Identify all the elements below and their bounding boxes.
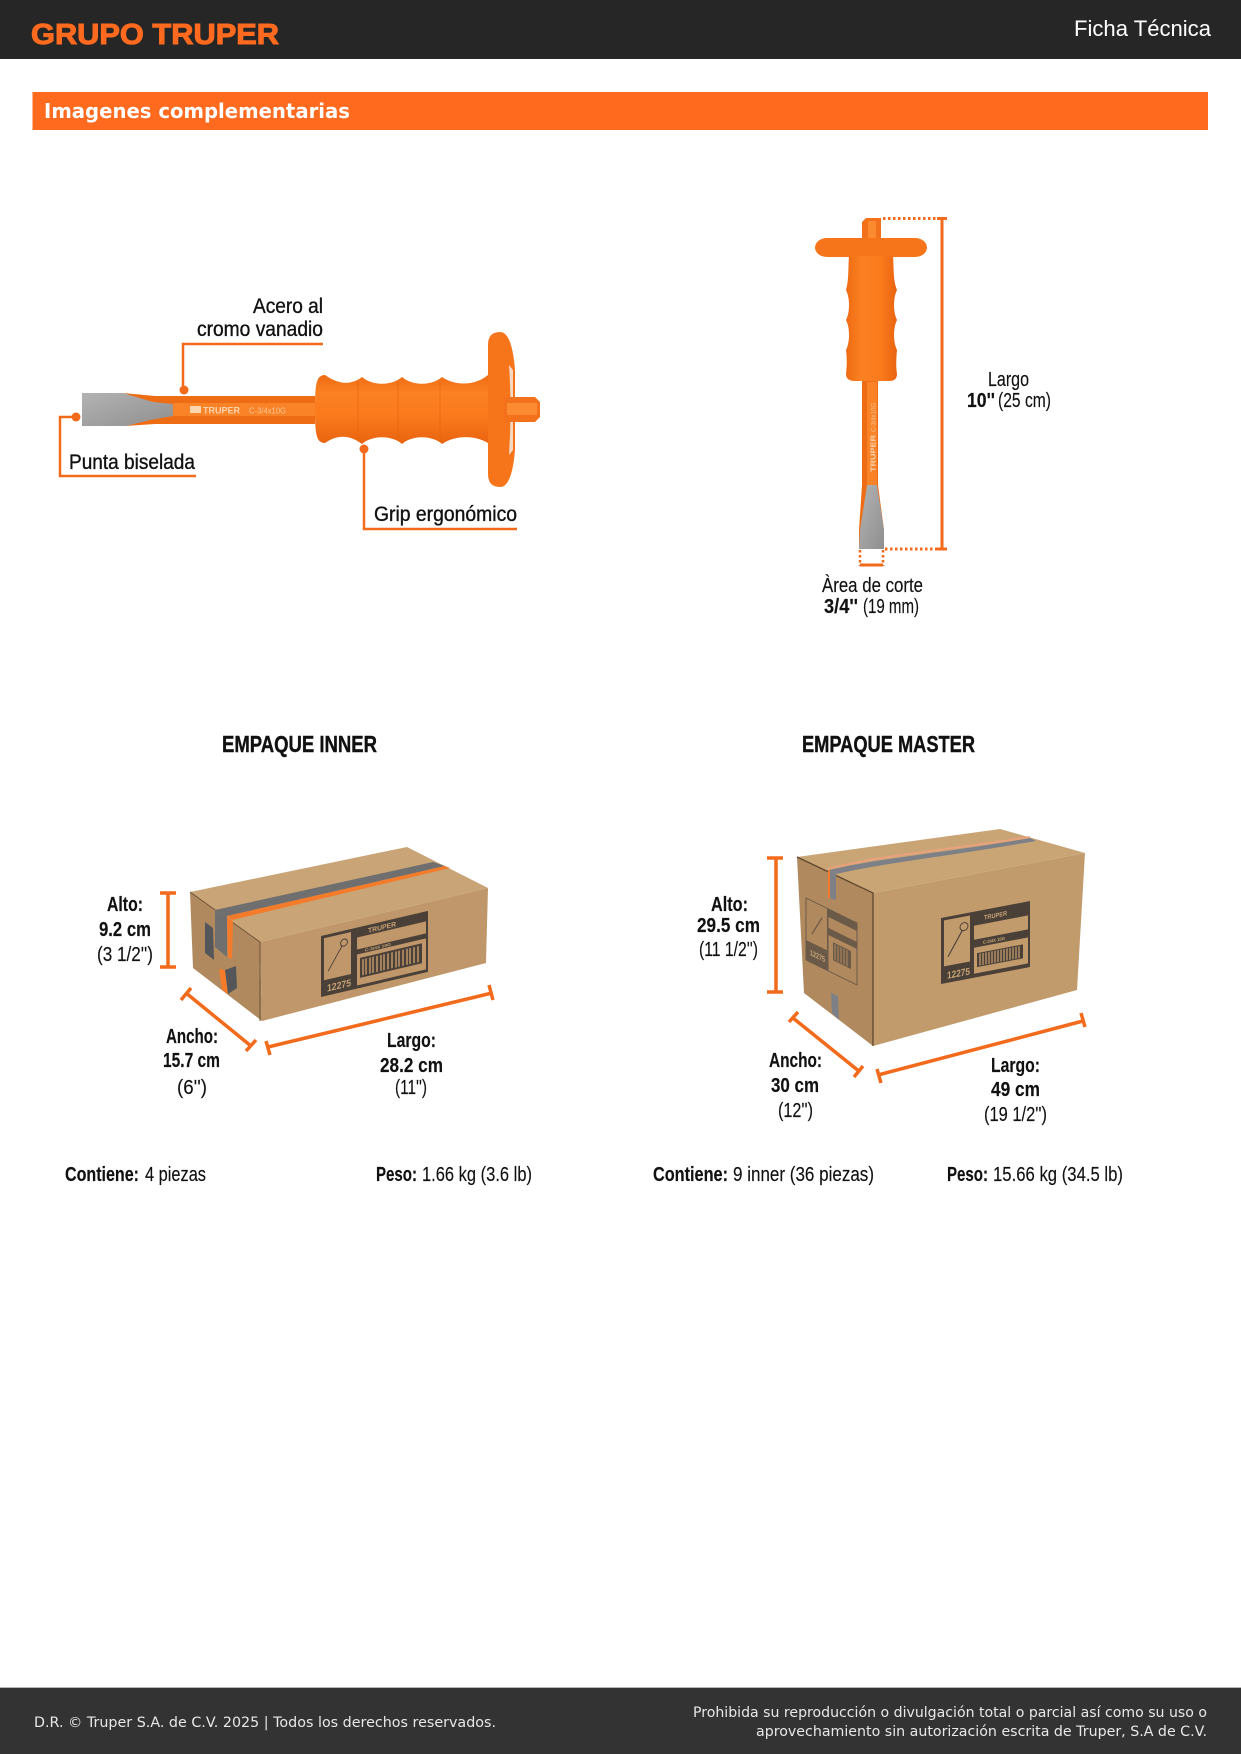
label: alto inner: 9.2 cm [99, 919, 151, 941]
callout: Acero al cromo vanadio [180, 295, 323, 394]
master contents: Contiene: [653, 1164, 728, 1186]
dimension line: largo master [877, 1013, 1085, 1083]
package label: master front [941, 901, 1030, 984]
package label: inner front [321, 911, 428, 997]
label: alto master: Alto: [711, 894, 748, 916]
callout: Punta biselada: Punta biselada [69, 451, 195, 474]
chisel horizontal [82, 332, 540, 487]
callout: Grip ergonómico [360, 444, 517, 529]
label: alto inner: Alto: [107, 894, 143, 916]
dimension: Área de corte line [860, 550, 883, 566]
footer legal notice [693, 1705, 1207, 1740]
master weight [947, 1164, 1123, 1186]
label: alto inner: (3 1/2'') [97, 944, 153, 966]
inner weight: Peso: [376, 1164, 417, 1186]
heading: Empaque Inner: EMPAQUE INNER [222, 731, 377, 757]
label: largo master: Largo: [991, 1055, 1040, 1077]
section heading: Imagenes complementarias: Imagenes complementarias [44, 99, 350, 123]
label: largo master: (19 1/2'') [984, 1104, 1047, 1126]
section heading: Imagenes complementarias [32, 92, 1208, 130]
product photo: vertical chisel with dimensions [815, 218, 1051, 618]
dimension line: largo inner [266, 985, 493, 1055]
cardboard box: master [797, 829, 1085, 1046]
master box with dimensions [697, 829, 1085, 1126]
inner contents: 4 piezas [145, 1164, 206, 1186]
label: ancho master: Ancho: [769, 1050, 822, 1072]
callout: Acero al cromo vanadio: cromo vanadio [197, 318, 323, 341]
master weight: Peso: [947, 1164, 988, 1186]
callout: Punta biselada [60, 412, 196, 476]
product photo: horizontal chisel with callouts [60, 295, 540, 529]
callout: Acero al cromo vanadio: Acero al [253, 295, 323, 318]
package label: master front: 12275 [947, 966, 970, 982]
chisel horizontal: C-3/4x10G [249, 406, 286, 416]
label: largo inner: (11'') [395, 1077, 427, 1099]
footer bar [0, 1687, 1241, 1754]
master contents: 9 inner (36 piezas) [733, 1164, 874, 1186]
label: largo inner: Largo: [387, 1030, 436, 1052]
label: alto master [697, 894, 760, 961]
dimension label: Largo 10 in [967, 369, 1051, 412]
label: largo inner [380, 1030, 443, 1099]
dimension label: Largo 10 in: 10'' [967, 390, 995, 412]
label: alto master: 29.5 cm [697, 915, 760, 937]
master weight: 15.66 kg (34.5 lb) [993, 1164, 1123, 1186]
label: alto master: (11 1/2'') [699, 939, 758, 961]
dimension label: Largo 10 in: (25 cm) [998, 390, 1051, 412]
inner weight [376, 1164, 532, 1186]
inner box with dimensions [97, 847, 493, 1099]
label: alto inner [97, 894, 153, 966]
package label: master front: TRUPER [984, 910, 1007, 922]
dimension line: ancho inner [181, 988, 256, 1051]
label: ancho inner: Ancho: [166, 1026, 218, 1048]
dimension label: Àrea de corte: 3/4'' [824, 596, 858, 618]
label: largo master: 49 cm [991, 1079, 1040, 1101]
label: largo inner: 28.2 cm [380, 1055, 443, 1077]
package label: master front: C-3/4X 10G [983, 936, 1005, 945]
dimension line: alto master [767, 858, 783, 992]
dimension line: ancho master [789, 1012, 863, 1077]
package label: master side: 12275 [810, 947, 825, 964]
master contents [653, 1164, 874, 1186]
dimension label: Largo 10 in: Largo [988, 369, 1029, 391]
dimension label: Àrea de corte: Àrea de corte [822, 574, 923, 597]
package label: inner front: TRUPER [368, 920, 396, 935]
footer legal notice: aprovechamiento sin autorización escrita de Truper, S.A de C.V. [756, 1724, 1207, 1740]
chisel horizontal: TRUPER [203, 406, 240, 416]
package label: inner front: 12275 [327, 978, 351, 995]
label: ancho inner: (6'') [177, 1077, 207, 1099]
dimension: Largo line [883, 218, 947, 549]
dimension label: Àrea de corte [822, 574, 923, 618]
dimension label: Àrea de corte: (19 mm) [863, 596, 919, 618]
chisel vertical: C-3/4x10G [870, 403, 878, 432]
chisel vertical [815, 218, 927, 549]
dimension line: alto inner [160, 893, 176, 967]
cardboard box: inner [190, 847, 488, 1021]
footer copyright: D.R. © Truper S.A. de C.V. 2025 | Todos los derechos reservados. [34, 1715, 496, 1731]
footer legal notice: Prohibida su reproducción o divulgación total o parcial así como su uso o [693, 1705, 1207, 1721]
inner weight: 1.66 kg (3.6 lb) [422, 1164, 532, 1186]
inner contents: Contiene: [65, 1164, 139, 1186]
header label: Ficha Técnica: Ficha Técnica [1074, 16, 1212, 41]
label: largo master [984, 1055, 1047, 1126]
chisel vertical: TRUPER [868, 434, 878, 472]
label: ancho inner: 15.7 cm [163, 1050, 220, 1072]
package label: inner front: C-3/4X 10G [365, 942, 391, 953]
label: ancho master: 30 cm [771, 1075, 819, 1097]
header bar [0, 0, 1241, 59]
logo: Grupo Truper: GRUPO TRUPER [31, 19, 279, 51]
package label: master side [806, 898, 857, 985]
inner contents [65, 1164, 206, 1186]
heading: Empaque Master: EMPAQUE MASTER [802, 731, 975, 757]
callout: Grip ergonómico: Grip ergonómico [374, 503, 517, 526]
label: ancho master: (12'') [778, 1100, 813, 1122]
label: ancho master [769, 1050, 822, 1122]
label: ancho inner [163, 1026, 220, 1099]
